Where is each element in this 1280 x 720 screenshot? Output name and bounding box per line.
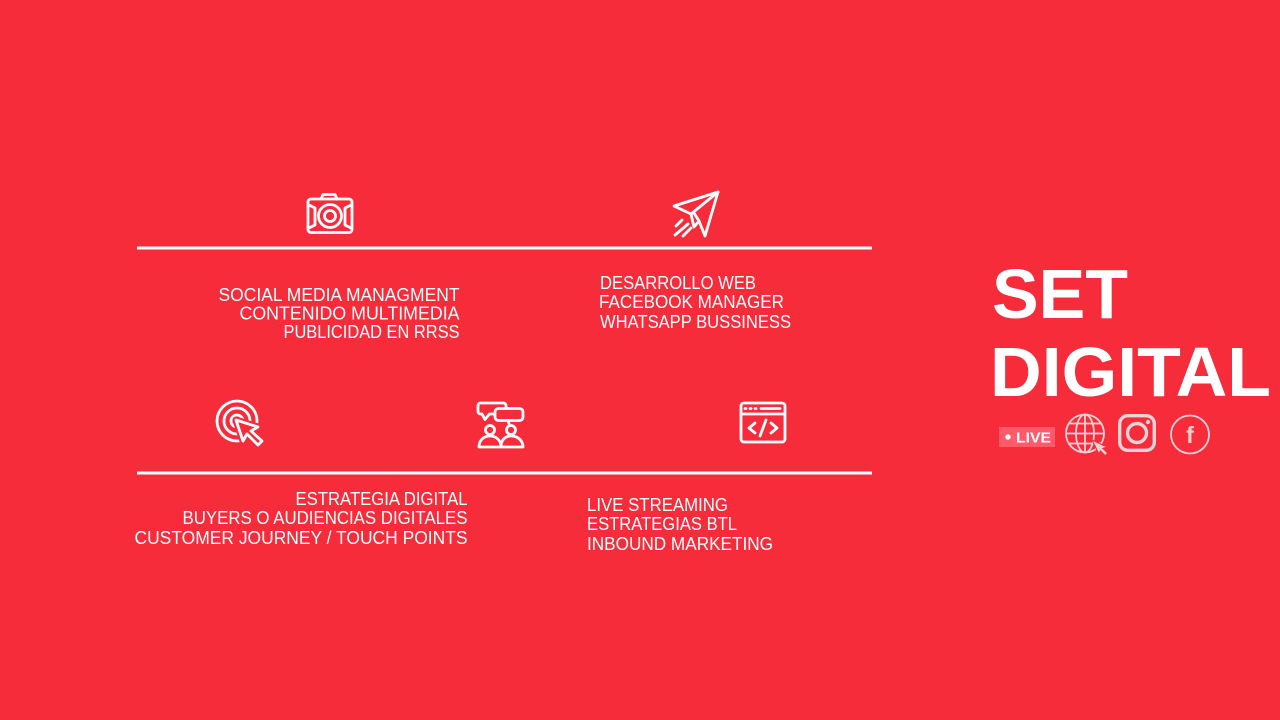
text block: web services (599, 273, 791, 332)
icon: instagram (1120, 416, 1154, 450)
divider: top row (137, 246, 872, 250)
icon: globe with cursor (1066, 414, 1107, 454)
text block: social media services: PUBLICIDAD EN RRSS (284, 322, 460, 342)
text block: web services: FACEBOOK MANAGER (599, 292, 784, 312)
icon: camera (308, 194, 352, 232)
title: DIGITAL (990, 333, 1271, 411)
icon: code window (741, 403, 785, 442)
icon: target with cursor (217, 401, 262, 445)
text block: web services: WHATSAPP BUSSINESS (600, 312, 791, 332)
icon: paper plane (674, 192, 718, 236)
text block: live and marketing services: ESTRATEGIAS BTL (587, 514, 737, 534)
text block: social media services: SOCIAL MEDIA MANAGMENT (218, 285, 460, 305)
text block: live and marketing services: INBOUND MARKETING (587, 534, 773, 554)
text block: strategy services: ESTRATEGIA DIGITAL (296, 489, 468, 509)
text block: strategy services (134, 489, 468, 548)
divider: bottom row (137, 472, 872, 474)
title (990, 255, 1271, 411)
icon: audience with chat bubbles (478, 403, 523, 447)
icon: facebook (1171, 416, 1209, 454)
text block: web services: DESARROLLO WEB (600, 273, 756, 293)
text block: strategy services: BUYERS O AUDIENCIAS DIGITALES (182, 508, 468, 528)
icon: facebook: f (1186, 422, 1194, 448)
text block: social media services (218, 285, 460, 342)
title: SET (992, 255, 1128, 333)
icon: live badge: LIVE (1016, 430, 1051, 446)
icon: live badge (999, 427, 1055, 447)
text block: live and marketing services (587, 495, 773, 554)
text block: strategy services: CUSTOMER JOURNEY / TOUCH POINTS (134, 528, 468, 548)
text block: social media services: CONTENIDO MULTIMEDIA (240, 304, 460, 324)
text block: live and marketing services: LIVE STREAMING (587, 495, 728, 515)
